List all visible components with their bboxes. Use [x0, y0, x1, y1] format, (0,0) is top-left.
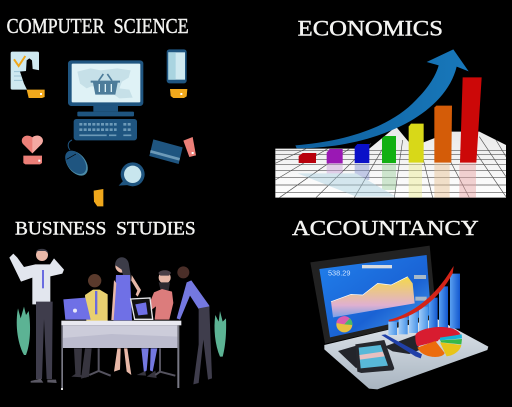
heading: computer science: COMPUTER SCIENCE	[7, 16, 189, 38]
smartphone	[355, 340, 394, 373]
pen	[381, 334, 422, 358]
tablet	[131, 298, 153, 319]
laptop screen	[310, 246, 437, 344]
icon: mouse	[61, 140, 92, 180]
heading: economics: ECONOMICS	[298, 16, 443, 41]
person: standing man on phone	[9, 249, 64, 383]
person: standing woman in blue dress	[111, 257, 141, 375]
person: leaning man in purple	[177, 266, 212, 384]
bar: dark red	[299, 153, 316, 163]
panel: economics	[275, 16, 506, 198]
icon: magnifier speech bubble	[119, 162, 145, 186]
bar: yellow	[409, 124, 424, 163]
chart floor grid	[275, 127, 506, 198]
icon: smartphone	[167, 49, 187, 98]
icon: desktop computer with basket	[68, 60, 143, 116]
person: seated man in yellow	[71, 274, 108, 379]
bar: orange	[434, 106, 452, 163]
heading: business studies: BUSINESS STUDIES	[15, 219, 196, 240]
icon: keyboard	[74, 119, 137, 140]
laptop screen: 538.29	[328, 269, 350, 278]
icon: checklist with pointing hand	[11, 52, 45, 98]
laptop base	[324, 318, 488, 389]
arrow: rising trend	[295, 49, 469, 148]
panel: accountancy	[292, 218, 488, 389]
plant left	[17, 307, 30, 355]
icon: heart with hand	[22, 136, 43, 164]
icon: credit card and hand	[149, 137, 196, 164]
arrow: red trend line	[388, 266, 454, 322]
bar: purple	[327, 149, 343, 163]
bar chart: blue 3D bars	[388, 274, 460, 335]
bar: green	[382, 136, 396, 163]
laptop purple	[63, 298, 91, 320]
heading: accountancy: ACCOUNTANCY	[292, 218, 479, 240]
pie chart	[415, 327, 462, 357]
icon: yellow hand	[94, 189, 103, 206]
panel: business studies	[9, 219, 226, 390]
plant right	[215, 311, 226, 357]
chart reflections	[298, 163, 476, 198]
bar: blue	[355, 144, 369, 163]
bar: red	[460, 77, 482, 163]
desk	[61, 321, 181, 390]
person: bearded man in pink	[137, 270, 173, 378]
panel: computer science	[7, 16, 196, 206]
